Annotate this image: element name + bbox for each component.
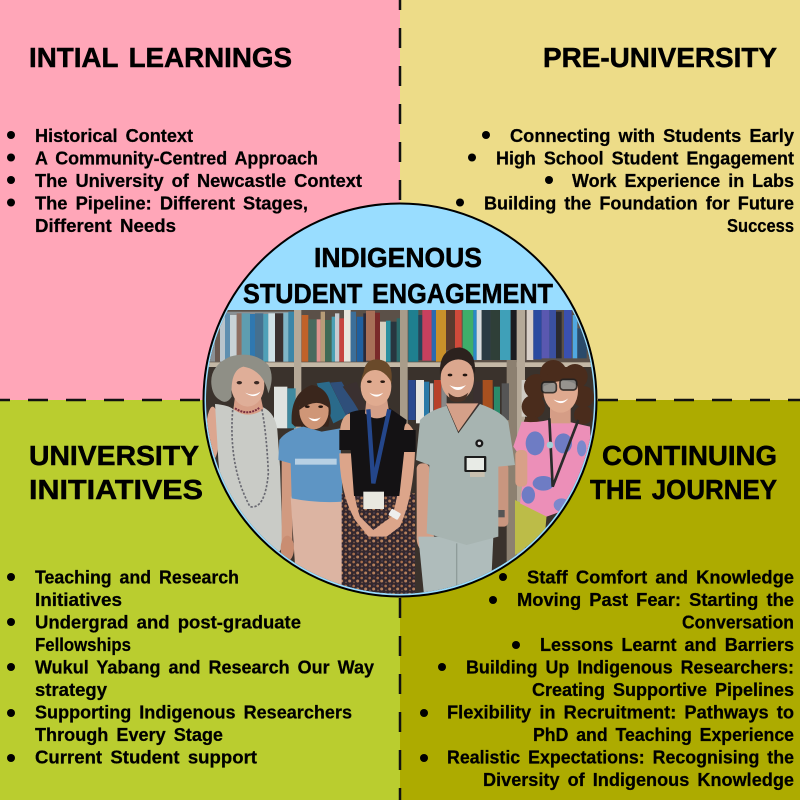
panel: continuing the journey bbox=[400, 400, 800, 800]
list: university initiatives: strategy bbox=[35, 680, 107, 700]
list: initial learnings bbox=[7, 126, 362, 236]
list: university initiatives bbox=[7, 568, 374, 768]
list: pre-university: Building the Foundation for Future bbox=[484, 194, 794, 214]
list: continuing the journey: Building Up Indigenous Researchers: bbox=[466, 658, 794, 678]
team photo illustration bbox=[200, 310, 600, 597]
list: university initiatives: Through Every Stage bbox=[35, 725, 223, 745]
list: pre-university: Connecting with Students Early bbox=[510, 126, 794, 146]
person 1 bbox=[206, 355, 283, 552]
circle title: INDIGENOUS bbox=[314, 242, 482, 273]
list: initial learnings: The Pipeline: Different Stages, bbox=[35, 194, 308, 214]
list: pre-university: High School Student Engagement bbox=[496, 148, 794, 168]
list: university initiatives: Current Student support bbox=[35, 748, 257, 768]
list: continuing the journey: Diversity of Indigenous Knowledge bbox=[483, 770, 794, 790]
list: university initiatives: Initiatives bbox=[35, 590, 122, 610]
circle title bbox=[243, 242, 553, 309]
heading: continuing the journey bbox=[590, 440, 777, 505]
heading: university initiatives: UNIVERSITY bbox=[29, 440, 199, 471]
list: continuing the journey: Conversation bbox=[682, 612, 794, 632]
list: continuing the journey: Creating Supportive Pipelines bbox=[532, 680, 794, 700]
heading: initial learnings: INTIAL LEARNINGS bbox=[29, 42, 292, 73]
central circle bbox=[200, 204, 600, 597]
list: continuing the journey: Realistic Expectations: Recognising the bbox=[447, 748, 794, 768]
heading: continuing the journey: CONTINUING bbox=[602, 440, 777, 471]
list: university initiatives: Teaching and Research bbox=[35, 568, 239, 588]
circle title: STUDENT ENGAGEMENT bbox=[243, 278, 553, 309]
list: continuing the journey: Lessons Learnt and Barriers bbox=[540, 635, 794, 655]
list: continuing the journey: Staff Comfort and Knowledge bbox=[527, 568, 794, 588]
heading: university initiatives: INITIATIVES bbox=[29, 474, 203, 505]
heading: pre-university: PRE-UNIVERSITY bbox=[543, 42, 777, 73]
list: pre-university bbox=[456, 126, 794, 236]
list: initial learnings: A Community-Centred Approach bbox=[35, 148, 318, 168]
list: continuing the journey: Flexibility in Recruitment: Pathways to bbox=[447, 702, 794, 722]
person 4 bbox=[416, 347, 515, 595]
list: pre-university: Success bbox=[727, 216, 794, 236]
panel: pre-university bbox=[400, 0, 800, 400]
panel: initial learnings bbox=[0, 0, 400, 400]
heading: continuing the journey: THE JOURNEY bbox=[590, 474, 777, 505]
list: university initiatives: Fellowships bbox=[35, 635, 131, 655]
person 2 bbox=[278, 385, 344, 593]
person 3 bbox=[339, 359, 416, 595]
heading: university initiatives bbox=[29, 440, 203, 505]
person 5 bbox=[513, 360, 594, 555]
bookshelf bbox=[200, 310, 600, 577]
list: university initiatives: Undergrad and post-graduate bbox=[35, 612, 301, 632]
list: initial learnings: Historical Context bbox=[35, 126, 193, 146]
list: pre-university: Work Experience in Labs bbox=[572, 171, 794, 191]
list: continuing the journey bbox=[420, 568, 794, 790]
list: initial learnings: The University of Newcastle Context bbox=[35, 171, 362, 191]
list: continuing the journey: Moving Past Fear: Starting the bbox=[517, 590, 794, 610]
list: continuing the journey: PhD and Teaching Experience bbox=[533, 725, 794, 745]
list: initial learnings: Different Needs bbox=[35, 216, 176, 236]
list: university initiatives: Wukul Yabang and Research Our Way bbox=[35, 658, 374, 678]
list: university initiatives: Supporting Indigenous Researchers bbox=[35, 702, 352, 722]
panel: university initiatives bbox=[0, 400, 400, 800]
